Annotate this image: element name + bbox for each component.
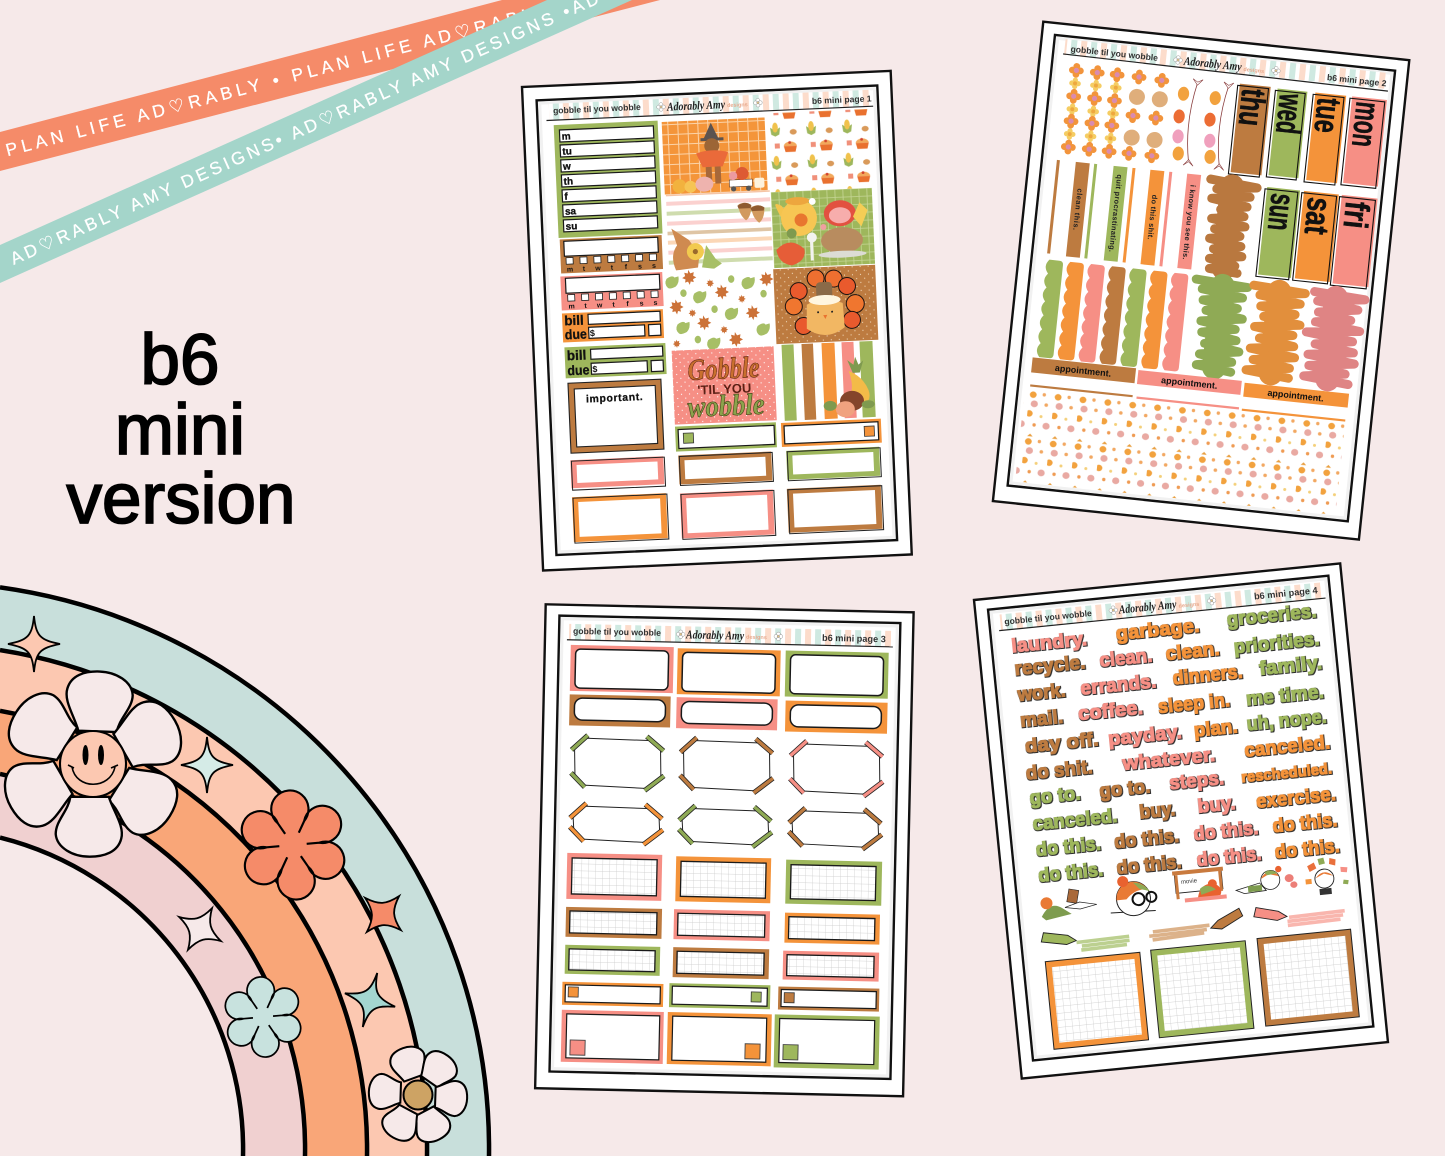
icon: coral sparkle	[349, 880, 417, 948]
slim quote tabs: quit procrastinating.	[1107, 174, 1124, 253]
marker: brown highlighter	[1147, 908, 1244, 940]
word stickers: do this.	[1037, 860, 1104, 887]
grid box orange	[1045, 952, 1149, 1049]
header strip: b6 mini page 2	[1327, 72, 1387, 88]
title: b6 mini version: mini	[115, 391, 245, 470]
word stickers: do this.	[1113, 826, 1180, 853]
scarecrow sticker	[662, 117, 768, 195]
word stickers: laundry.	[1010, 629, 1088, 657]
pumpkin bunting	[1168, 77, 1234, 170]
header strip: Adorably Amy	[1182, 54, 1243, 74]
word stickers: buy.	[1197, 793, 1237, 818]
habit tracker pink: f	[626, 301, 630, 308]
header strip: b6 mini page 1	[812, 93, 872, 106]
habit tracker pink: w	[596, 302, 603, 309]
appointment labels	[1029, 357, 1349, 422]
turkey sticker	[773, 265, 878, 344]
word stickers: priorities.	[1233, 629, 1320, 658]
grid boxes row two	[565, 907, 880, 945]
bill due orange	[562, 309, 664, 342]
panel: mini page 1	[522, 71, 912, 571]
weekday tabs second row	[1255, 187, 1378, 289]
striped sticker with acorns and leaves	[665, 190, 773, 271]
checkbox labels	[562, 981, 879, 1012]
character: head with glasses	[1107, 873, 1158, 918]
habit tracker pink: t	[612, 302, 616, 309]
word stickers: mail.	[1019, 707, 1064, 732]
rounded boxes large	[570, 645, 889, 699]
character: girl lying down	[1234, 864, 1298, 894]
corn and pie pattern sticker	[768, 109, 872, 192]
gobble til you wobble sticker: 'TIL YOU	[697, 380, 752, 398]
scribble brown	[1201, 179, 1258, 274]
word stickers: errands.	[1080, 671, 1157, 700]
panel: mini page 3	[535, 604, 914, 1096]
icon: teal flower	[223, 974, 303, 1060]
habit tracker brown: t	[611, 265, 614, 272]
word stickers: clean.	[1165, 639, 1221, 665]
word stickers: dinners.	[1172, 662, 1244, 690]
weekly checklist green: tu	[562, 146, 572, 158]
grid box green	[1151, 941, 1254, 1038]
scalloped tabs	[1036, 259, 1189, 372]
habit tracker pink: m	[568, 303, 575, 311]
header strip: Adorably Amy	[1117, 597, 1178, 617]
word stickers: uh, nope.	[1246, 707, 1328, 735]
teapot and turkey sticker	[771, 188, 875, 268]
taped frames row two	[570, 803, 882, 850]
header strip: designs	[727, 102, 748, 109]
word stickers: buy.	[1138, 799, 1176, 824]
word stickers: sleep in.	[1157, 690, 1231, 718]
weekly checklist green	[554, 121, 663, 238]
gobble til you wobble sticker: Gobble	[687, 351, 760, 387]
scribble pink	[1301, 291, 1365, 385]
word stickers: day off.	[1024, 729, 1100, 758]
weekday tabs top row: thu	[1231, 87, 1272, 128]
header strip: gobble til you wobble	[1070, 44, 1159, 63]
pumpkin pattern	[1015, 390, 1345, 515]
gobble til you wobble sticker: wobble	[687, 388, 765, 424]
habit tracker brown: s	[638, 263, 642, 271]
icon: smiley daisy	[0, 670, 192, 857]
character: light bulb idea	[1303, 855, 1350, 896]
panel: mini page 4	[974, 563, 1388, 1079]
word stickers: do shit.	[1025, 757, 1094, 785]
important frame	[568, 379, 664, 453]
rainbow	[0, 587, 489, 1156]
habit tracker brown: s	[652, 263, 656, 270]
weekday tabs top row: tue	[1306, 96, 1348, 135]
header strip	[998, 582, 1326, 631]
word stickers: steps.	[1168, 768, 1225, 794]
row of large boxes	[572, 484, 884, 544]
icon: teal star	[338, 966, 402, 1034]
slim quote tabs	[1047, 160, 1201, 270]
word stickers: payday.	[1107, 722, 1183, 750]
character: movie night: movie	[1181, 878, 1198, 886]
header strip: b6 mini page 4	[1254, 585, 1319, 602]
panel: mini page 2	[993, 22, 1409, 540]
pumpkin flower strips	[1121, 69, 1171, 164]
header strip: b6 mini page 3	[822, 633, 886, 644]
icon: white daisy	[368, 1042, 468, 1148]
weekly checklist green: sa	[565, 206, 577, 218]
autumn leaves pattern sticker	[665, 266, 776, 352]
large checkbox labels	[561, 1010, 880, 1070]
weekday tabs top row: mon	[1344, 100, 1387, 149]
grid boxes row one	[566, 853, 882, 906]
habit tracker brown: m	[567, 266, 573, 274]
word stickers: plan.	[1193, 716, 1239, 742]
word stickers: work.	[1016, 680, 1067, 706]
icon: white sparkle	[167, 896, 233, 962]
word stickers: coffee.	[1077, 698, 1144, 725]
word stickers: do this.	[1196, 844, 1262, 871]
character: girl reading	[1039, 886, 1098, 921]
word stickers: me time.	[1245, 682, 1325, 710]
word stickers: do this.	[1272, 810, 1338, 837]
weekly checklist green: th	[563, 176, 573, 188]
word stickers: garbage.	[1115, 616, 1201, 645]
row of small boxes	[570, 447, 881, 490]
weekly checklist green: su	[565, 221, 578, 233]
word stickers: recycle.	[1014, 652, 1086, 680]
weekly checklist green: f	[564, 192, 569, 203]
header strip: Adorably Amy	[685, 627, 745, 643]
word stickers	[1010, 601, 1342, 887]
gobble til you wobble sticker	[672, 346, 777, 425]
weekly checklist green: m	[561, 131, 571, 143]
slim quote tabs: do this shit.	[1146, 194, 1159, 240]
habit tracker pink: s	[639, 300, 644, 308]
scribble green	[1187, 279, 1248, 373]
grid box brown	[1257, 929, 1359, 1026]
bill due orange: bill	[564, 313, 584, 328]
word stickers: groceries.	[1226, 601, 1317, 631]
header strip	[546, 90, 873, 120]
word stickers: do this.	[1116, 852, 1182, 879]
word stickers: family.	[1258, 653, 1323, 680]
habit tracker pink: t	[584, 303, 588, 310]
character: movie night	[1172, 867, 1227, 902]
header strip: gobble til you wobble	[553, 102, 641, 116]
habit tracker pink: s	[653, 300, 658, 307]
appointment labels: appointment.	[1161, 375, 1218, 391]
bill due green	[564, 343, 667, 378]
flower strips	[1060, 62, 1125, 159]
weekday tabs second row: sat	[1297, 196, 1338, 236]
bill due green: due	[567, 362, 590, 378]
label with orange checkbox	[781, 419, 882, 447]
word stickers: clean.	[1099, 646, 1153, 672]
header strip: gobble til you wobble	[1004, 608, 1092, 627]
ribbon: plan life adorably: PLAN LIFE AD♡RABLY • PLAN LIFE AD♡RABLY	[3, 0, 553, 161]
word stickers: do this.	[1274, 836, 1341, 863]
weekday tabs top row: wed	[1268, 91, 1310, 136]
slim quote tabs: clean this.	[1071, 188, 1085, 231]
grid boxes row three	[565, 945, 879, 982]
weekday tabs second row: sun	[1260, 192, 1302, 232]
title: b6 mini version	[67, 321, 295, 539]
header strip	[1063, 39, 1390, 91]
header strip: designs	[1178, 602, 1200, 610]
icon: teal sparkle	[181, 737, 233, 793]
marker: pink highlighter	[1253, 899, 1346, 929]
habit tracker brown: f	[625, 264, 628, 271]
bill due green: bill	[566, 347, 587, 363]
scribble orange	[1245, 285, 1306, 379]
habit tracker brown: t	[583, 266, 586, 273]
weekday tabs top row	[1225, 83, 1387, 190]
header strip	[567, 624, 893, 647]
taped frames row one	[571, 735, 884, 797]
bill due orange: due	[565, 326, 588, 342]
header strip: gobble til you wobble	[573, 626, 661, 638]
slim quote tabs: i know you see this.	[1181, 184, 1198, 260]
appointment labels: appointment.	[1267, 388, 1324, 404]
habit tracker pink	[560, 272, 664, 311]
important frame: important.	[586, 391, 644, 405]
label with green checkbox	[675, 422, 777, 452]
word stickers: go to.	[1098, 776, 1151, 802]
word stickers: do this.	[1035, 834, 1102, 861]
rounded boxes small	[569, 694, 888, 734]
habit tracker brown	[560, 235, 663, 274]
word stickers: exercise.	[1255, 784, 1337, 813]
weekday tabs second row: fri	[1336, 200, 1376, 230]
title: b6 mini version: version	[67, 460, 295, 539]
title: b6 mini version: b6	[141, 321, 219, 400]
icon: peach sparkle	[8, 616, 60, 672]
bill due orange: $	[590, 328, 595, 338]
bill due green: $	[592, 364, 598, 374]
habit tracker brown: w	[594, 265, 601, 273]
appointment labels: appointment.	[1054, 363, 1112, 379]
word stickers: do this.	[1193, 818, 1259, 845]
header strip: designs	[746, 635, 767, 641]
word stickers: rescheduled.	[1241, 760, 1333, 786]
weekly checklist green: w	[562, 161, 571, 173]
marker: green highlighter	[1040, 924, 1130, 954]
header strip: designs	[1243, 67, 1264, 75]
striped cornucopia sticker	[781, 341, 876, 421]
icon: coral flower	[239, 786, 347, 904]
word stickers: go to.	[1029, 783, 1081, 809]
word stickers: canceled.	[1243, 732, 1331, 762]
word stickers: canceled.	[1032, 806, 1118, 835]
word stickers: whatever.	[1121, 745, 1216, 775]
header strip: Adorably Amy	[666, 97, 726, 114]
